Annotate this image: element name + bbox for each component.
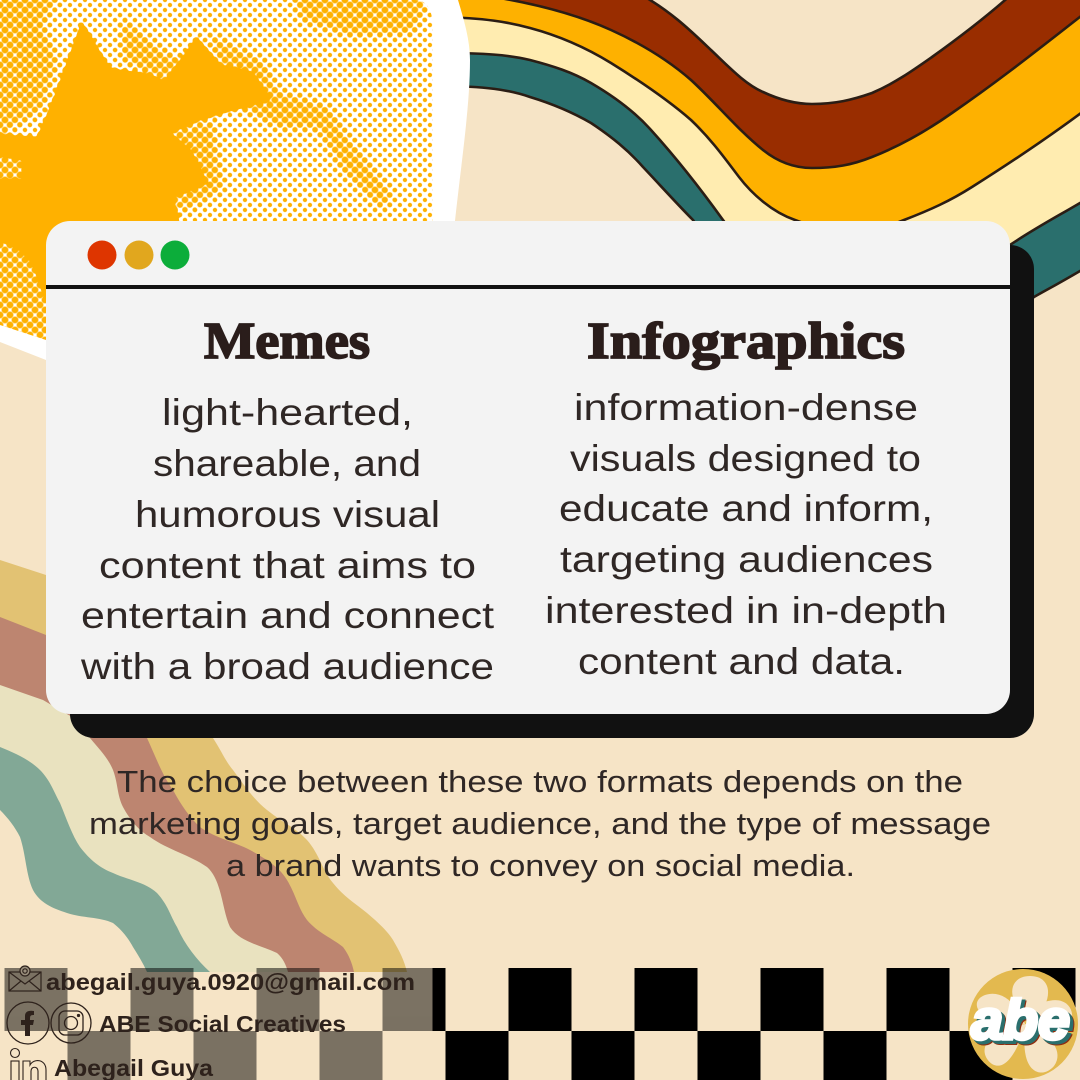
retro wavy stripes bbox=[0, 560, 407, 972]
white cut-out behind halftone bbox=[0, 0, 470, 360]
retro rainbow stripes bbox=[440, 0, 1080, 500]
infographics description: information-dense bbox=[574, 387, 918, 428]
conclusion paragraph bbox=[89, 764, 991, 883]
memes description: humorous visual bbox=[135, 494, 440, 535]
memes heading: Memes bbox=[204, 313, 370, 370]
contact: linkedin bbox=[10, 1048, 213, 1080]
conclusion paragraph: a brand wants to convey on social media. bbox=[226, 848, 855, 883]
infographics description: visuals designed to bbox=[570, 438, 921, 479]
memes description: shareable, and bbox=[153, 443, 421, 484]
solid orange blob bbox=[0, 22, 270, 300]
window buttons bbox=[88, 240, 190, 270]
memes description bbox=[80, 392, 495, 687]
memes description: with a broad audience bbox=[80, 646, 494, 687]
logo wordmark: abe bbox=[971, 988, 1070, 1051]
flower petals bbox=[977, 976, 1072, 1073]
contact: social: ABE Social Creatives bbox=[99, 1011, 346, 1037]
checkerboard strip bbox=[4, 968, 1076, 1080]
infographics description: targeting audiences bbox=[560, 539, 933, 580]
contact: email: abegail.guya.0920@gmail.com bbox=[46, 969, 415, 995]
logo wordmark: abe bbox=[974, 991, 1073, 1054]
window card bbox=[46, 221, 1010, 714]
memes description: content that aims to bbox=[99, 545, 476, 586]
memes description: light-hearted, bbox=[162, 392, 413, 433]
window title bar line bbox=[46, 285, 1010, 289]
infographics column bbox=[545, 313, 947, 682]
dense halftone streaks bbox=[0, 0, 440, 350]
infographics description bbox=[545, 387, 947, 682]
icon: linkedin bbox=[10, 1048, 46, 1080]
icon: envelope bbox=[9, 966, 41, 991]
halftone sun splash bbox=[0, 0, 433, 340]
window shadow bbox=[70, 245, 1034, 738]
infographics description: interested in in-depth bbox=[545, 590, 947, 631]
icon: instagram bbox=[51, 1003, 91, 1043]
infographics description: educate and inform, bbox=[559, 488, 933, 529]
logo badge bbox=[968, 969, 1078, 1079]
memes description: entertain and connect bbox=[81, 595, 495, 636]
conclusion paragraph: The choice between these two formats depends on the bbox=[117, 764, 963, 799]
icon: facebook bbox=[7, 1002, 49, 1044]
logo wordmark: abe bbox=[975, 992, 1074, 1055]
conclusion paragraph: marketing goals, target audience, and the type of message bbox=[89, 806, 991, 841]
infographics description: content and data. bbox=[578, 641, 905, 682]
contact: social bbox=[7, 1002, 346, 1044]
infographics heading: Infographics bbox=[587, 313, 905, 370]
memes column bbox=[80, 313, 495, 687]
